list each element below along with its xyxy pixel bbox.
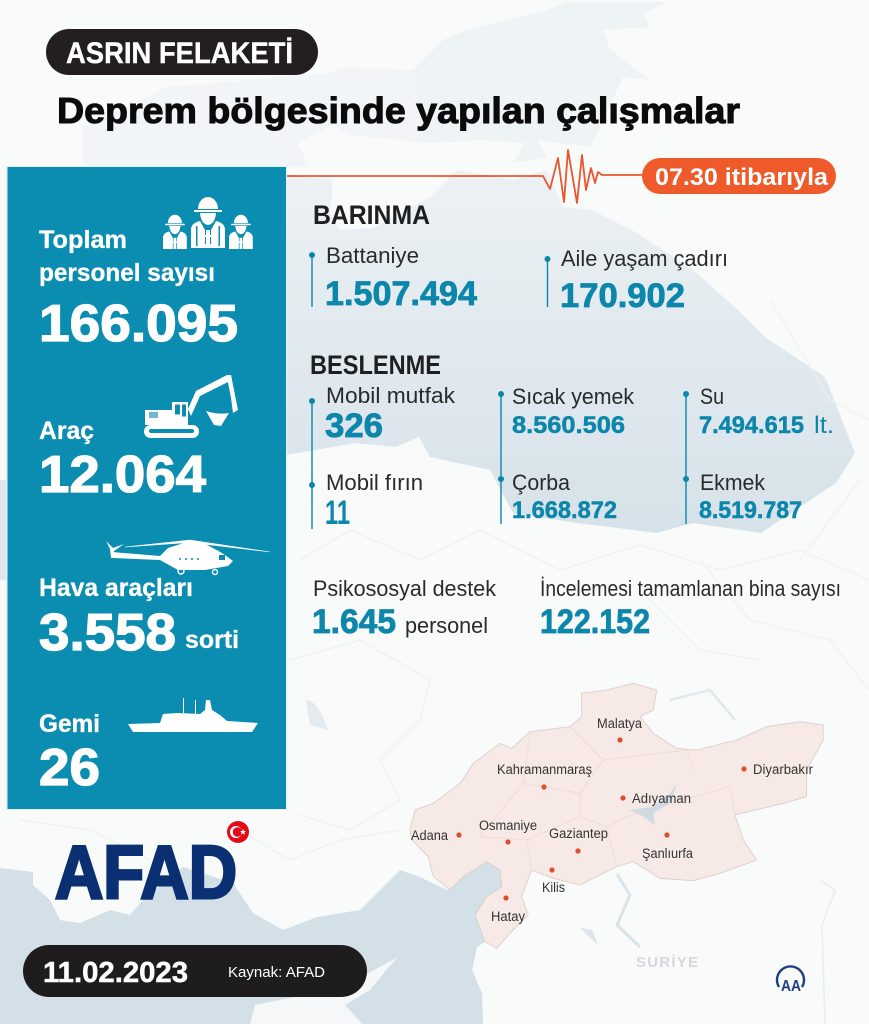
Hatay: Hatay (491, 909, 525, 924)
Gaziantep (549, 826, 608, 854)
Hatay (491, 895, 525, 924)
stat: Sıcak yemek and Çorba: 1.668.872 (512, 497, 617, 524)
Osmaniye: Osmaniye (479, 818, 537, 833)
Şanlıurfa: Şanlıurfa (642, 846, 693, 861)
stat: Battaniye (309, 243, 477, 313)
time badge (642, 158, 836, 194)
stat: Su and Ekmek: Ekmek (700, 470, 766, 495)
ships (39, 710, 100, 797)
Adana: Adana (411, 828, 448, 843)
air vehicles: sorti (185, 626, 239, 654)
stat: Psikososyal destek (312, 576, 497, 641)
stat: Battaniye: Battaniye (326, 243, 419, 268)
vehicles: Araç (39, 417, 94, 445)
icon: Turkish flag (227, 821, 249, 843)
footer: date and source (23, 945, 367, 997)
stat: İncelemesi tamamlanan bina sayısı (540, 576, 841, 641)
Osmaniye (479, 818, 537, 845)
stat: Mobil mutfak and Mobil fırın: Mobil mutfak (326, 383, 456, 408)
icon: excavator (144, 375, 238, 438)
Kilis: Kilis (542, 880, 565, 895)
footer: date and source: 11.02.2023 (43, 957, 188, 989)
Adıyaman: Adıyaman (632, 791, 691, 806)
Gaziantep: Gaziantep (549, 826, 608, 841)
stat: Sıcak yemek and Çorba: Sıcak yemek (512, 384, 635, 409)
stat: Mobil mutfak and Mobil fırın: 11 (325, 494, 350, 532)
stat: Battaniye: 1.507.494 (325, 275, 477, 313)
total personnel: 166.095 (39, 295, 238, 353)
stat: Su and Ekmek (683, 384, 834, 524)
stat: Su and Ekmek: 8.519.787 (699, 497, 802, 524)
stat: Psikososyal destek: 1.645 (312, 603, 396, 641)
title: Deprem bölgesinde yapılan çalışmalar (57, 90, 740, 131)
badge: Asrın Felaketi: ASRIN FELAKETİ (66, 37, 293, 70)
section: Barınma (309, 200, 728, 315)
icon: AA logo (777, 966, 804, 995)
air vehicles (39, 574, 239, 662)
stat: İncelemesi tamamlanan bina sayısı: 122.152 (540, 603, 650, 641)
vehicles: 12.064 (39, 446, 206, 504)
stat: Psikososyal destek: Psikososyal destek (313, 576, 497, 601)
region map: earthquake provinces (410, 683, 823, 948)
panel: totals (6, 166, 287, 810)
stat: Su and Ekmek: Su (700, 384, 724, 409)
stat: Sıcak yemek and Çorba: Çorba (512, 470, 571, 495)
heading: BESLENME (310, 350, 441, 380)
total personnel (39, 226, 238, 353)
ships: Gemi (39, 710, 100, 738)
heading: BARINMA (313, 200, 430, 230)
stat: Psikososyal destek: personel (405, 613, 488, 638)
total personnel: Toplam (39, 226, 127, 254)
Malatya: Malatya (597, 716, 642, 731)
stat: Mobil mutfak and Mobil fırın (309, 383, 456, 532)
city labels (411, 716, 813, 924)
country label: Suriye: SURİYE (636, 954, 698, 971)
air vehicles: Hava araçları (39, 574, 193, 602)
stat: Aile yaşam çadırı (544, 246, 728, 315)
stat: Su and Ekmek: lt. (814, 412, 834, 439)
section: Beslenme (309, 350, 834, 532)
icon: workers (163, 197, 253, 249)
stat: Aile yaşam çadırı: Aile yaşam çadırı (561, 246, 728, 271)
Malatya (597, 716, 642, 743)
stat: Sıcak yemek and Çorba: 8.560.506 (512, 412, 625, 439)
badge: Asrın Felaketi (46, 29, 318, 75)
icon: ship (128, 698, 258, 732)
total personnel: personel sayısı (39, 259, 215, 287)
Kahramanmaraş (497, 762, 592, 790)
icon: AA logo: AA (781, 978, 801, 995)
stat: Aile yaşam çadırı: 170.902 (560, 277, 685, 315)
Diyarbakır: Diyarbakır (753, 762, 813, 777)
stat: Mobil mutfak and Mobil fırın: Mobil fırın (326, 470, 423, 495)
stat: Mobil mutfak and Mobil fırın: 326 (325, 407, 383, 445)
icon: helicopter (106, 540, 270, 574)
time badge: 07.30 itibarıyla (655, 164, 829, 191)
Şanlıurfa (642, 832, 693, 861)
ships: 26 (39, 739, 100, 797)
stat: Sıcak yemek and Çorba (498, 384, 635, 524)
Kilis (542, 867, 565, 895)
logo: AFAD: AFAD (55, 830, 237, 914)
Kahramanmaraş: Kahramanmaraş (497, 762, 592, 777)
seismic line (286, 150, 645, 203)
air vehicles: 3.558 (39, 604, 176, 662)
footer: date and source: Kaynak: AFAD (228, 965, 325, 981)
vehicles (39, 417, 206, 504)
stat: Su and Ekmek: 7.494.615 (699, 412, 804, 439)
